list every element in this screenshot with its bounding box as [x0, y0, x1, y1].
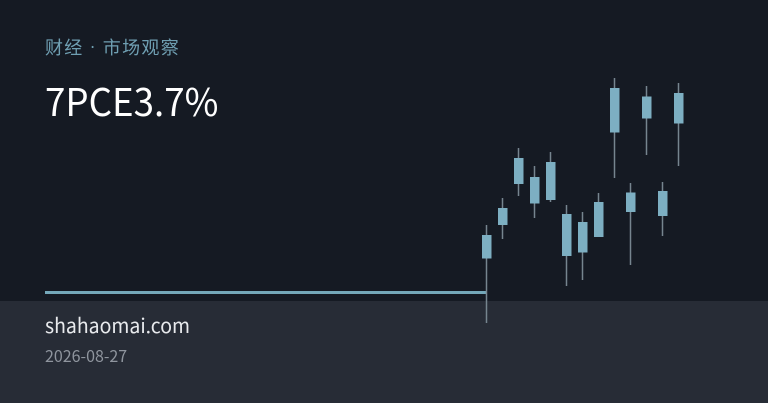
footer band	[0, 301, 768, 403]
title: 7PCE3.7%	[45, 72, 218, 127]
eyebrow label: 财经 · 市场观察	[45, 39, 180, 57]
site name: shahaomai.com	[45, 310, 190, 339]
date: 2026-08-27	[45, 343, 127, 367]
price line	[45, 291, 486, 294]
